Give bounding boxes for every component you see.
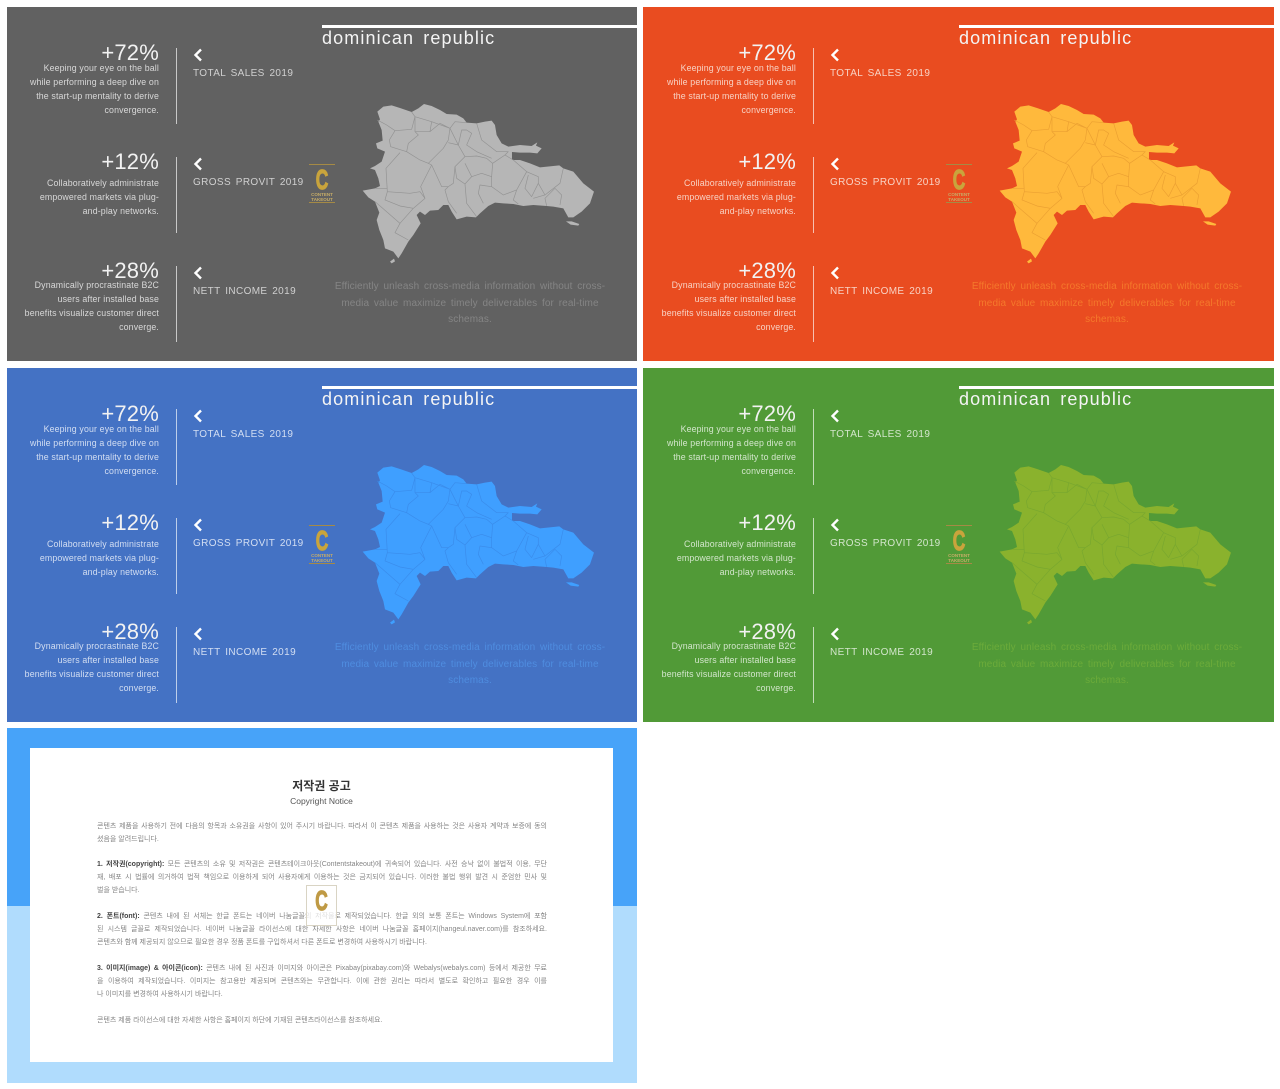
text: stat three description: benefits visualize customer direct [662, 308, 796, 318]
divider one [813, 48, 814, 124]
icon: notice logo: C [315, 885, 328, 916]
stat: +12%: +12% [738, 510, 796, 535]
stat: +72%: +72% [101, 40, 159, 65]
text: stat one description: while performing a deep dive on [667, 77, 796, 87]
heading: dominican republic [322, 28, 495, 48]
label: nett income: NETT INCOME 2019 [193, 286, 296, 297]
text: stat two description: and-play networks. [720, 567, 796, 577]
map: orange [1000, 104, 1231, 264]
text: stat one description: convergence. [742, 105, 796, 115]
panel: blue dominican republic [7, 368, 637, 722]
icon: chevron three [194, 628, 202, 640]
divider one [176, 48, 177, 124]
icon: gold logo: CONTENT [311, 553, 333, 558]
text: stat three description: users after installed base [695, 655, 796, 665]
text: stat one description: Keeping your eye on the ball [44, 424, 159, 434]
icon: gold logo: CONTENT [311, 192, 333, 197]
text: map paragraph [972, 281, 1242, 325]
text: stat two description: Collaboratively administrate [684, 178, 796, 188]
icon: gold logo: TAKEOUT [311, 197, 333, 202]
text: stat one description: while performing a deep dive on [30, 77, 159, 87]
text: stat one description: Keeping your eye on the ball [681, 424, 796, 434]
text: stat three description: users after installed base [695, 294, 796, 304]
text: notice body: 3. 이미지(image) & 아이콘(icon): 콘텐츠 내에 된 사진과 이미지와 아이콘은 Pixabay(pixabay.com)와 Webalys(webalys.com) 등에서 제공한 무료 [97, 965, 547, 972]
text: map paragraph [335, 642, 605, 686]
text: notice body: 재, 배포 시 법률에 의거하여 법적 책임으로 이용하게 되어 사용자에게 이용하는 것은 금지되어 있습니다. 이러한 불법 행위 발견 시 준엄한 민사 및 [97, 874, 547, 881]
text: stat three description: benefits visualize customer direct [25, 308, 159, 318]
panel: green dominican republic [644, 368, 1274, 722]
text: stat one description: the start-up mentality to derive [36, 91, 159, 101]
text: stat two description: and-play networks. [720, 206, 796, 216]
stat: +72%: +72% [101, 401, 159, 426]
map: gray [362, 104, 594, 264]
stat: +28%: +28% [101, 258, 159, 283]
stat: +12%: +12% [101, 149, 159, 174]
divider three [176, 266, 177, 342]
icon: gold logo: TAKEOUT [948, 197, 970, 202]
text: stat two description [40, 178, 159, 216]
divider one [813, 409, 814, 485]
title bar [322, 25, 637, 28]
stat: +28%: +28% [738, 258, 796, 283]
icon: gold logo: TAKEOUT [311, 558, 333, 563]
text: stat two description: and-play networks. [83, 567, 159, 577]
subheading: copyright notice: Copyright Notice [290, 796, 353, 806]
text: stat two description: and-play networks. [83, 206, 159, 216]
heading: dominican republic [322, 389, 495, 409]
text: stat three description: benefits visualize customer direct [25, 669, 159, 679]
divider three [813, 627, 814, 703]
text: stat three description: Dynamically procrastinate B2C [35, 641, 159, 651]
text: stat two description: empowered markets via plug- [677, 553, 796, 563]
text: notice body: 콘텐츠 제품 라이선스에 대한 자세한 사항은 홈페이지 하단에 기재된 콘텐츠라이선스를 참조하세요. [97, 1017, 382, 1024]
white notice card [30, 748, 613, 1062]
text: notice body: 벌을 받습니다. [97, 887, 140, 894]
heading: notice title: 저작권 공고 [292, 779, 351, 793]
text: stat three description [25, 280, 159, 332]
label: total sales: TOTAL SALES 2019 [830, 429, 930, 440]
text: stat one description: while performing a deep dive on [30, 438, 159, 448]
icon: gold logo: C [953, 525, 965, 556]
icon: gold logo [946, 525, 972, 564]
text: stat one description: the start-up mentality to derive [673, 452, 796, 462]
icon: chevron three [194, 266, 202, 280]
heading: dominican republic [959, 389, 1132, 409]
text: map paragraph: Efficiently unleash cross-media information without cross- [972, 642, 1242, 653]
icon: gold logo [309, 164, 335, 203]
text: stat three description: converge. [756, 322, 796, 332]
text: stat one description: convergence. [742, 466, 796, 476]
text: stat three description: Dynamically procrastinate B2C [672, 280, 796, 290]
text: stat one description [30, 63, 159, 115]
text: stat one description: while performing a deep dive on [667, 438, 796, 448]
text: notice body: 2. 폰트(font): 콘텐츠 내에 된 서체는 한글 폰트는 네이버 나눔글꼴의 저작물로 제작되었습니다. 한글 외의 보통 폰트는 Windows System에 포함 [97, 913, 547, 920]
icon: chevron three [830, 266, 839, 280]
text: stat three description: converge. [119, 683, 159, 693]
text: map paragraph: schemas. [448, 675, 492, 686]
text: stat one description: convergence. [104, 466, 159, 476]
text: stat three description: converge. [756, 683, 796, 693]
stat: +72%: +72% [738, 40, 796, 65]
text: stat two description: Collaboratively administrate [684, 539, 796, 549]
text: stat one description [667, 424, 796, 476]
label: total sales: TOTAL SALES 2019 [830, 68, 930, 79]
text: stat two description: Collaboratively administrate [47, 539, 159, 549]
text: notice body: 콘텐츠와 함께 제공되지 않으므로 필요한 경우 정품 폰트를 구입하셔서 다른 폰트로 변경하여 사용하시기 바랍니다. [97, 939, 427, 946]
label: nett income: NETT INCOME 2019 [830, 286, 933, 297]
text: notice body: 나 이미지를 변경하여 사용하시기 바랍니다. [97, 991, 223, 998]
text: map paragraph: schemas. [448, 314, 492, 325]
icon: chevron two [194, 158, 202, 170]
icon: chevron two [830, 518, 839, 532]
stat: +72%: +72% [738, 401, 796, 426]
text: stat two description [677, 539, 796, 577]
label: total sales: TOTAL SALES 2019 [193, 68, 293, 79]
text: stat three description: users after installed base [58, 294, 159, 304]
text: stat two description [40, 539, 159, 577]
icon: gold logo: C [316, 164, 328, 195]
icon: notice logo [306, 885, 337, 926]
text: stat one description: the start-up mentality to derive [36, 452, 159, 462]
text: stat one description: Keeping your eye on the ball [44, 63, 159, 73]
stat: +28%: +28% [101, 619, 159, 644]
text: map paragraph: Efficiently unleash cross-media information without cross- [335, 281, 605, 292]
label: nett income: NETT INCOME 2019 [830, 647, 933, 658]
icon: gold logo [946, 164, 972, 203]
icon: chevron two [194, 518, 202, 532]
title bar [959, 25, 1274, 28]
text: notice body: 콘텐츠 제품을 사용하기 전에 다음의 항목과 소유권을 사항이 있어 주시기 바랍니다. 따라서 이 콘텐츠 제품을 사용하는 것은 사용자 계약과 보증에 동의 [97, 823, 547, 830]
icon: gold logo: C [953, 164, 965, 195]
background: two-tone blue [7, 728, 637, 1083]
text: stat three description: converge. [119, 322, 159, 332]
text: map paragraph: schemas. [1085, 314, 1129, 325]
text: notice body: 된 시스템 글꼴로 제작되었습니다. 네이버 나눔글꼴 라이선스에 대한 자세한 사항은 네이버 나눔글꼴 홈페이지(hangeul.naver.com)를 참조하세요. [97, 926, 547, 933]
text: map paragraph: Efficiently unleash cross-media information without cross- [972, 281, 1242, 292]
divider one [176, 409, 177, 485]
text: stat three description: Dynamically procrastinate B2C [35, 280, 159, 290]
text: stat two description: Collaboratively administrate [47, 178, 159, 188]
divider three [176, 627, 177, 703]
text: notice body: 1. 저작권(copyright): 모든 콘텐츠의 소유 및 저작권은 콘텐츠테이크아웃(Contentstakeout)에 귀속되어 있습니다. 사전 승낙 없이 불법적 이용, 무단 [97, 861, 547, 868]
label: total sales: TOTAL SALES 2019 [193, 429, 293, 440]
text: notice body: 을 이용하여 제작되었습니다. 이미지는 참고용만 제공되며 콘텐츠와는 무관합니다. 이에 관한 권리는 따라서 별도로 확인하고 필요한 경우 이를 [97, 978, 547, 985]
title bar [322, 386, 637, 389]
text: stat one description [30, 424, 159, 476]
text: map paragraph [335, 281, 605, 325]
text: stat two description: empowered markets via plug- [677, 192, 796, 202]
text: stat two description [677, 178, 796, 216]
text: stat one description: Keeping your eye on the ball [681, 63, 796, 73]
text: map paragraph: media value maximize timely deliverables for real-time [978, 658, 1236, 670]
text: stat one description: convergence. [104, 105, 159, 115]
label: gross provit: GROSS PROVIT 2019 [830, 177, 941, 188]
icon: chevron three [830, 628, 839, 640]
divider two [176, 518, 177, 594]
panel: gray dominican republic [7, 7, 637, 361]
icon: gold logo [309, 525, 335, 564]
text: stat one description: the start-up mentality to derive [673, 91, 796, 101]
text: stat three description: users after installed base [58, 655, 159, 665]
icon: chevron one [830, 410, 839, 422]
heading: dominican republic [959, 28, 1132, 48]
icon: gold logo: CONTENT [948, 553, 970, 558]
text: stat three description: benefits visualize customer direct [662, 669, 796, 679]
icon: chevron two [830, 158, 839, 170]
text: notice body: 셨음을 알려드립니다. [97, 836, 159, 843]
divider three [813, 266, 814, 342]
map: green [1000, 465, 1231, 624]
divider two [813, 157, 814, 233]
stat: +28%: +28% [738, 619, 796, 644]
text: map paragraph: schemas. [1085, 675, 1129, 686]
label: gross provit: GROSS PROVIT 2019 [193, 538, 304, 549]
text: map paragraph [972, 642, 1242, 686]
title bar [959, 386, 1274, 389]
text: stat one description [667, 63, 796, 115]
label: nett income: NETT INCOME 2019 [193, 647, 296, 658]
text: map paragraph: media value maximize timely deliverables for real-time [341, 298, 599, 308]
icon: gold logo: CONTENT [948, 192, 970, 197]
label: gross provit: GROSS PROVIT 2019 [193, 177, 304, 188]
divider two [813, 518, 814, 594]
label: gross provit: GROSS PROVIT 2019 [830, 538, 941, 549]
text: stat three description [662, 280, 796, 332]
text: stat two description: empowered markets via plug- [40, 192, 159, 202]
panel: orange dominican republic [644, 7, 1274, 361]
icon: gold logo: C [316, 525, 328, 556]
text: map paragraph: media value maximize timely deliverables for real-time [978, 298, 1236, 308]
stat: +12%: +12% [101, 510, 159, 535]
icon: gold logo: TAKEOUT [948, 558, 970, 563]
text: map paragraph: Efficiently unleash cross-media information without cross- [335, 642, 605, 653]
icon: chevron one [194, 48, 202, 62]
text: stat two description: empowered markets via plug- [40, 553, 159, 563]
stat: +12%: +12% [738, 149, 796, 174]
divider two [176, 157, 177, 233]
text: stat three description [25, 641, 159, 693]
text: map paragraph: media value maximize timely deliverables for real-time [341, 658, 599, 670]
icon: chevron one [194, 410, 202, 422]
text: stat three description: Dynamically procrastinate B2C [672, 641, 796, 651]
map: blue [362, 465, 594, 624]
icon: chevron one [830, 48, 839, 62]
text: stat three description [662, 641, 796, 693]
